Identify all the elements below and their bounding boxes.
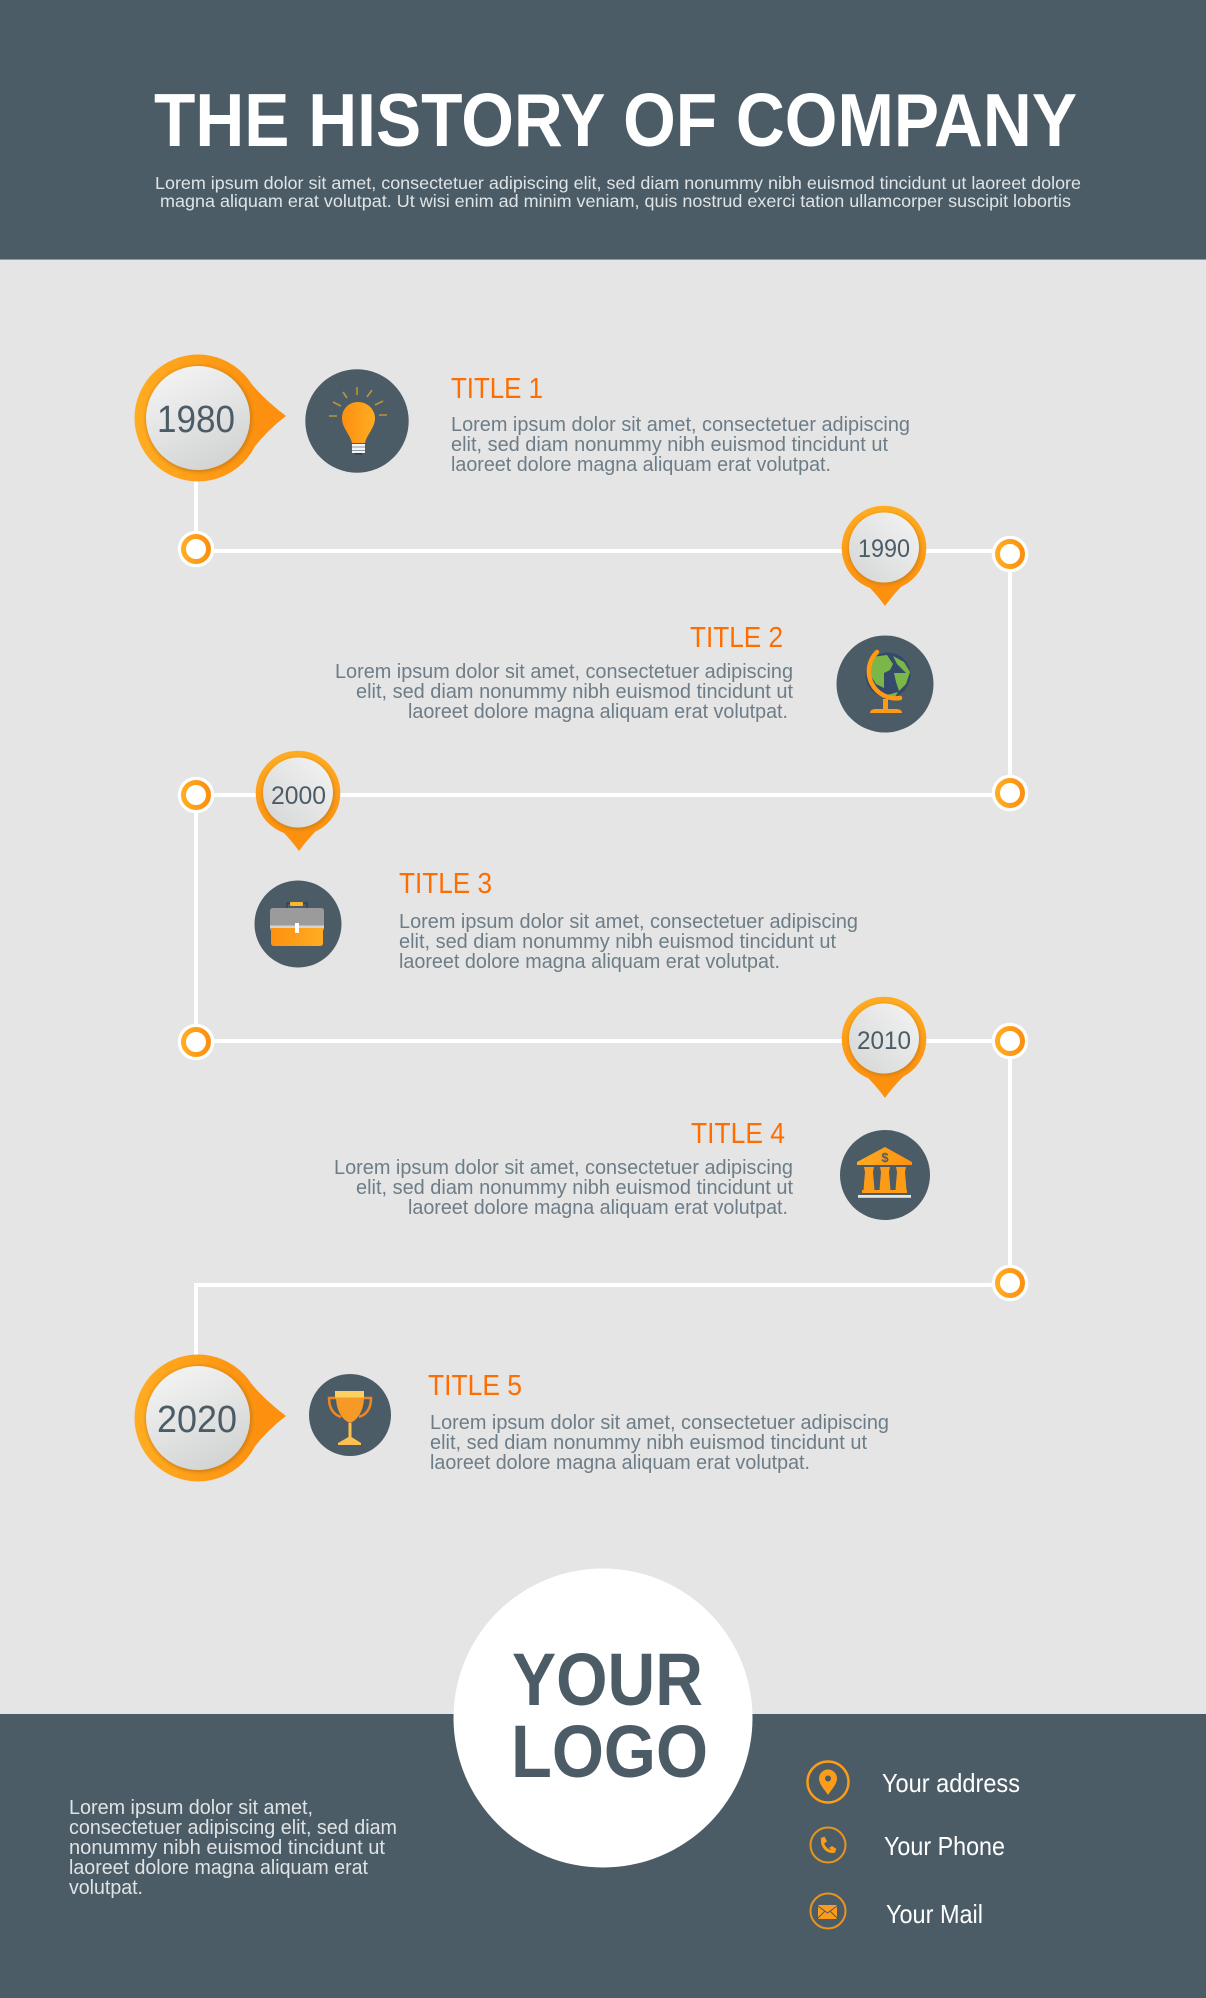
text block: title 1: TITLE 1 (451, 373, 543, 405)
text block: title 1: laoreet dolore magna aliquam erat volutpat. (451, 453, 831, 476)
text block: title 5: Lorem ipsum dolor sit amet, consectetuer adipiscing (430, 1411, 889, 1434)
text block: title 3 (399, 868, 858, 973)
title: THE HISTORY OF COMPANY (154, 78, 1077, 162)
text block: title 5: elit, sed diam nonummy nibh euismod tincidunt ut (430, 1431, 867, 1454)
year pin 2000 (256, 751, 340, 851)
year label: 1980 (157, 399, 235, 441)
icon: light bulb (305, 369, 409, 473)
year label: 2000 (271, 782, 326, 810)
footer text: volutpat. (69, 1876, 143, 1899)
text block: title 2: elit, sed diam nonummy nibh euismod tincidunt ut (356, 680, 793, 703)
text block: title 2: Lorem ipsum dolor sit amet, consectetuer adipiscing (335, 660, 793, 683)
contact: phone (810, 1828, 1005, 1862)
text block: title 5: laoreet dolore magna aliquam erat volutpat. (430, 1451, 810, 1474)
footer text: laoreet dolore magna aliquam erat (69, 1856, 368, 1879)
text block: title 5: TITLE 5 (428, 1370, 522, 1402)
header panel (0, 0, 1206, 260)
icon: globe (836, 636, 934, 732)
icon: briefcase (254, 880, 342, 968)
text block: title 4: Lorem ipsum dolor sit amet, consectetuer adipiscing (334, 1156, 793, 1179)
text block: title 1: elit, sed diam nonummy nibh euismod tincidunt ut (451, 433, 888, 456)
subtitle text (155, 173, 1081, 211)
text block: title 4: TITLE 4 (691, 1118, 785, 1150)
contact: mail (810, 1894, 983, 1929)
year label: 1990 (858, 535, 910, 563)
text block: title 2 (335, 622, 793, 723)
footer text (69, 1796, 397, 1899)
text block: title 4 (334, 1118, 793, 1219)
contact: address: Your address (882, 1768, 1020, 1798)
year pin 2020 (134, 1354, 286, 1482)
text block: title 4: laoreet dolore magna aliquam erat volutpat. (408, 1196, 788, 1219)
year pin 2010 (842, 997, 926, 1098)
year label: 2020 (157, 1399, 237, 1441)
icon: trophy (309, 1374, 391, 1456)
text block: title 1: Lorem ipsum dolor sit amet, consectetuer adipiscing (451, 413, 910, 436)
logo text (511, 1638, 708, 1793)
footer text: Lorem ipsum dolor sit amet, (69, 1796, 313, 1819)
text block: title 1 (451, 373, 910, 476)
text block: title 2: TITLE 2 (690, 622, 783, 654)
contact: mail: Your Mail (886, 1899, 983, 1929)
text block: title 3: TITLE 3 (399, 868, 492, 900)
timeline nodes (178, 531, 1028, 1301)
text block: title 4: elit, sed diam nonummy nibh euismod tincidunt ut (356, 1176, 793, 1199)
subtitle text: Lorem ipsum dolor sit amet, consectetuer adipiscing elit, sed diam nonummy nibh euismod tincidunt ut laoreet dolore (155, 173, 1081, 193)
contact: address (808, 1762, 1020, 1802)
logo text: YOUR (512, 1638, 703, 1721)
footer panel (0, 1714, 1206, 1998)
text block: title 5 (428, 1370, 889, 1474)
footer text: nonummy nibh euismod tincidunt ut (69, 1836, 385, 1859)
year pin 1980 (134, 354, 286, 482)
text block: title 3: elit, sed diam nonummy nibh euismod tincidunt ut (399, 930, 836, 953)
icon: bank (840, 1130, 930, 1220)
text block: title 3: Lorem ipsum dolor sit amet, consectetuer adipiscing (399, 910, 858, 933)
logo text: LOGO (511, 1710, 708, 1793)
year label: 2010 (857, 1027, 911, 1055)
subtitle text: magna aliquam erat volutpat. Ut wisi enim ad minim veniam, quis nostrud exerci tation ullamcorper suscipit lobortis (160, 191, 1071, 211)
footer text: consectetuer adipiscing elit, sed diam (69, 1816, 397, 1839)
text block: title 3: laoreet dolore magna aliquam erat volutpat. (399, 950, 780, 973)
logo circle (454, 1568, 752, 1868)
text block: title 2: laoreet dolore magna aliquam erat volutpat. (408, 700, 788, 723)
timeline path (196, 478, 1010, 1362)
year pin 1990 (842, 506, 926, 606)
icon: bank: $ (881, 1150, 889, 1165)
contact: phone: Your Phone (884, 1831, 1005, 1861)
